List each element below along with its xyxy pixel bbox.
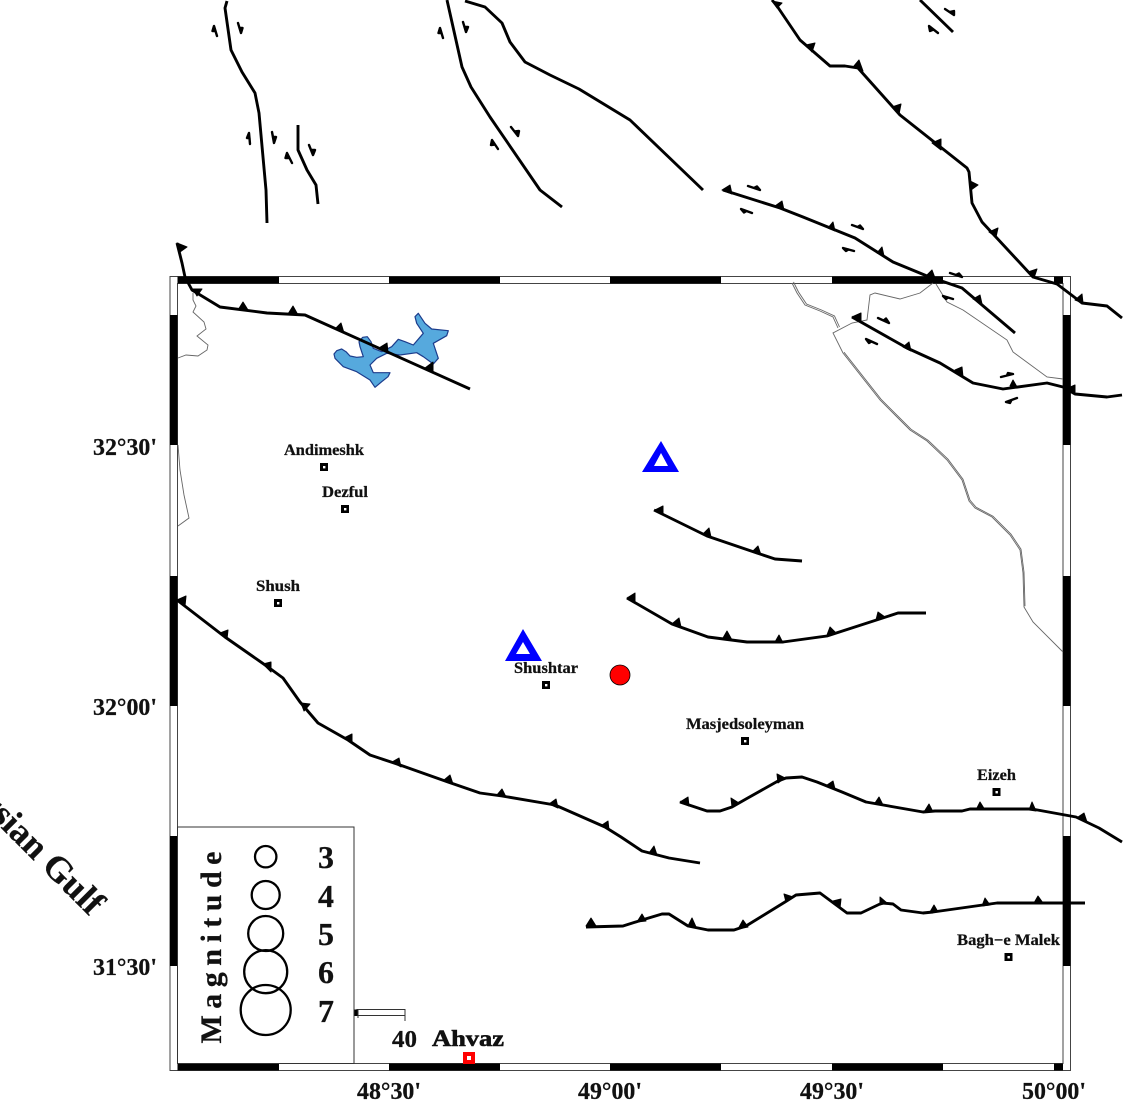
thrust fault: Izeh <box>680 774 1122 842</box>
seismic station: Shushtar triangle <box>505 629 542 661</box>
city: Andimeshk: Andimeshk <box>284 442 364 459</box>
map frame with alternating black and white border <box>170 276 1070 1070</box>
lake <box>334 313 448 387</box>
city: Shush <box>256 578 300 607</box>
latitude labels <box>93 435 157 981</box>
city: Shushtar <box>514 660 578 689</box>
city: Andimeshk <box>284 442 364 471</box>
legend: magnitude: 4 <box>318 878 334 914</box>
thrust fault: central south <box>627 593 926 643</box>
city: Bagh-e Malek <box>957 932 1060 961</box>
legend: magnitude: 6 <box>318 954 334 990</box>
scale bar <box>354 1009 417 1053</box>
rivers <box>178 282 1063 652</box>
thrust fault: north-east, middle <box>722 185 1015 333</box>
strike-slip faults: north <box>225 0 953 223</box>
latitude labels: 32°00' <box>93 695 157 721</box>
city: Ahvaz <box>432 1026 504 1062</box>
city: Eizeh: Eizeh <box>977 767 1016 784</box>
city: Bagh-e Malek: Bagh−e Malek <box>957 932 1060 949</box>
thrust fault: north-west, Dez <box>177 243 470 389</box>
latitude labels: 32°30' <box>93 435 157 461</box>
latitude labels: 31°30' <box>93 955 157 981</box>
thrust fault: north-east, long <box>772 0 1122 318</box>
legend: magnitude: 5 <box>318 916 334 952</box>
city: Masjedsoleyman <box>686 716 804 745</box>
city: Ahvaz: Ahvaz <box>432 1026 504 1051</box>
city: Shushtar: Shushtar <box>514 660 578 677</box>
city: Dezful <box>322 484 369 513</box>
half-arrows: strike-slip sense of motion <box>212 9 1017 403</box>
thrust fault: southern <box>586 893 1085 930</box>
legend: magnitude: Magnitude <box>195 852 228 1044</box>
longitude labels <box>357 1079 1086 1102</box>
seismic station: north triangle <box>642 441 679 472</box>
city: Shush: Shush <box>256 578 300 595</box>
earthquake epicentre <box>610 665 630 685</box>
scale bar: 40 <box>392 1027 417 1053</box>
thrust fault: north-east, lower <box>852 313 1122 397</box>
legend: magnitude <box>178 827 354 1064</box>
city: Masjedsoleyman: Masjedsoleyman <box>686 716 804 733</box>
thrust fault: central north <box>654 506 802 561</box>
legend: magnitude: 3 <box>318 839 334 875</box>
city: Eizeh <box>977 767 1016 796</box>
city: Dezful: Dezful <box>322 484 369 501</box>
legend: magnitude: 7 <box>318 993 334 1029</box>
thrust fault: south-west, Mountain Front <box>177 596 700 863</box>
